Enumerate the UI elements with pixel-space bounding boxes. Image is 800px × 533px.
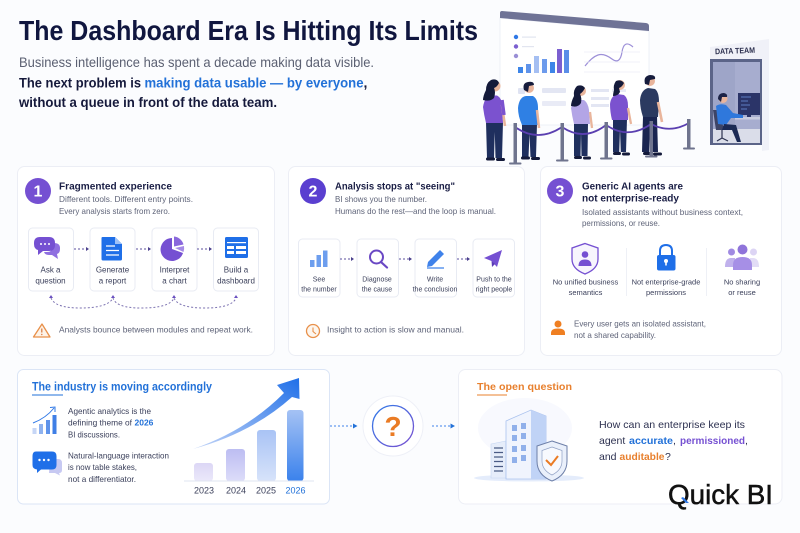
person 4: [610, 80, 631, 156]
item: no unified semantics: No unified business: [553, 278, 618, 286]
note: Insight to action is slow and manual.: [327, 324, 464, 334]
seated analyst: [713, 93, 743, 142]
illustration: queue of people: [483, 75, 662, 161]
step: ask a question: [28, 228, 74, 291]
heading: Generic AI agents are: [582, 180, 683, 192]
text: agentic analytics: 2026: [134, 418, 154, 428]
heading: The industry is moving accordingly: [32, 382, 213, 394]
flow arrows between steps: [74, 247, 212, 251]
note: [574, 318, 706, 340]
step: diagnose the cause: Diagnose: [362, 276, 392, 284]
question text: ,: [673, 435, 676, 447]
step: ask a question: question: [35, 276, 66, 286]
description: permissions, or reuse.: [582, 218, 660, 228]
text: natural language: is now table stakes,: [68, 462, 137, 472]
step number 3: 3: [556, 184, 565, 200]
illustration: queue stanchions and rope: [509, 119, 695, 164]
arrow: to question: [330, 424, 358, 428]
item: no unified semantics: semantics: [569, 288, 603, 297]
step number 1: 1: [34, 184, 43, 200]
item: not enterprise-grade permissions: [632, 245, 700, 297]
step: build a dashboard: Build a: [224, 266, 249, 274]
note: not a shared capability.: [574, 330, 656, 340]
heading: Analysis stops at "seeing": [335, 180, 455, 192]
item: not enterprise-grade permissions: Not enterprise-grade: [632, 278, 700, 286]
icon: clock: [306, 324, 320, 338]
illustration: data team room: DATA TEAM: [715, 46, 755, 56]
bar chart 2023-2026: [184, 410, 314, 496]
person 3: [571, 85, 592, 160]
illustration: data team room: [710, 39, 769, 151]
description: Isolated assistants without business context,: [582, 207, 743, 217]
text: natural language: [68, 450, 169, 484]
step: generate a report: [90, 228, 135, 291]
step: diagnose the cause: [357, 239, 398, 297]
heading: not enterprise-ready: [582, 192, 679, 204]
heading: The open question: [477, 381, 572, 393]
icon: chat bubbles: [32, 452, 62, 476]
question text: How can an enterprise keep its: [599, 419, 745, 431]
step: diagnose the cause: the cause: [362, 286, 392, 294]
step: interpret a chart: Interpret: [160, 266, 190, 274]
step: see the number: See: [313, 276, 325, 284]
heading: Fragmented experience: [59, 180, 172, 192]
heading: [582, 180, 683, 204]
step: write the conclusion: [413, 239, 457, 297]
bar chart 2023-2026: 2023: [194, 486, 214, 496]
title: The Dashboard Era Is Hitting Its Limits: [19, 15, 478, 46]
panel: generic AI agents: [540, 166, 782, 356]
step number 2: [300, 178, 326, 204]
step number 2: 2: [309, 184, 318, 200]
step: generate a report: a report: [99, 276, 127, 286]
question text: auditable: [620, 451, 665, 463]
panel: industry is moving accordingly: [18, 370, 330, 504]
question text: ,: [745, 435, 748, 447]
step: interpret a chart: [152, 228, 197, 291]
icon: warning: [34, 324, 50, 337]
item: no sharing or reuse: [724, 244, 760, 297]
icon: orange person: [551, 320, 565, 335]
step number 1: [25, 178, 51, 204]
item: no sharing or reuse: No sharing: [724, 278, 760, 286]
logo: Quick BI: Quick BI: [668, 479, 773, 510]
bar chart 2023-2026: 2026: [285, 486, 306, 496]
arrow: to open question: [432, 424, 455, 428]
description: Humans do the rest—and the loop is manual.: [335, 206, 496, 216]
growth arrow: [193, 378, 300, 449]
description: [59, 194, 193, 216]
illustration: building with shield: [474, 398, 584, 482]
step: write the conclusion: the conclusion: [413, 286, 457, 294]
description: Every analysis starts from zero.: [59, 206, 170, 216]
step: push to the right people: right people: [476, 286, 512, 294]
step: generate a report: Generate: [96, 266, 130, 274]
bounce-back loops: [49, 295, 238, 308]
step number 3: [547, 178, 573, 204]
flow arrows between steps: [340, 257, 470, 261]
subtitle text block: without a queue in front of the data team.: [18, 94, 277, 110]
text: agentic analytics: [68, 406, 154, 440]
subtitle text block: ,: [364, 74, 367, 90]
question text: ?: [665, 451, 671, 463]
step: push to the right people: [473, 239, 514, 297]
subtitle text block: Business intelligence has spent a decade making data visible.: [19, 54, 374, 70]
step: build a dashboard: [214, 228, 258, 291]
text: natural language: Natural-language interaction: [68, 450, 169, 460]
bar chart 2023-2026: 2024: [226, 486, 246, 496]
step: see the number: the number: [301, 286, 337, 294]
desk and monitor: [735, 93, 760, 120]
panel: analysis stops at seeing: [288, 166, 524, 356]
text: agentic analytics: BI discussions.: [68, 430, 120, 440]
step: ask a question: Ask a: [40, 266, 61, 274]
question text: [599, 419, 748, 463]
description: [582, 207, 743, 228]
subtitle text block: making data usable — by everyone: [144, 74, 364, 90]
note: Analysts bounce between modules and repeat work.: [59, 324, 253, 334]
person 2: [518, 82, 540, 160]
step: see the number: [298, 239, 340, 297]
item: not enterprise-grade permissions: permissions: [646, 288, 686, 297]
icon: question mark: [363, 396, 423, 456]
item: no sharing or reuse: or reuse: [728, 288, 756, 297]
description: Different tools. Different entry points.: [59, 194, 193, 204]
icon: growth chart: [32, 407, 56, 434]
note: Every user gets an isolated assistant,: [574, 318, 706, 328]
step: write the conclusion: Write: [427, 276, 443, 284]
panel: the open question: [458, 370, 782, 510]
illustration: dashboard screen: [500, 11, 649, 125]
question text: agent: [599, 435, 625, 447]
person 1: [483, 79, 505, 161]
panel: fragmented experience: [18, 166, 274, 356]
description: BI shows you the number.: [335, 194, 427, 204]
subtitle text block: [18, 54, 374, 110]
text: agentic analytics: defining theme of: [68, 418, 133, 428]
item: no unified semantics: [553, 244, 618, 297]
question text: accurate: [629, 435, 673, 447]
question text: and: [599, 451, 617, 463]
question text: permissioned: [680, 435, 745, 447]
step: interpret a chart: a chart: [162, 276, 188, 286]
icon: question mark: ?: [384, 411, 402, 442]
text: agentic analytics: Agentic analytics is the: [68, 406, 151, 416]
step: build a dashboard: dashboard: [217, 276, 255, 286]
step: push to the right people: Push to the: [476, 276, 512, 284]
subtitle text block: The next problem is: [19, 74, 141, 90]
bar chart 2023-2026: 2025: [256, 486, 276, 496]
text: natural language: not a differentiator.: [68, 474, 136, 484]
person 5: [640, 75, 662, 156]
description: [335, 194, 496, 216]
